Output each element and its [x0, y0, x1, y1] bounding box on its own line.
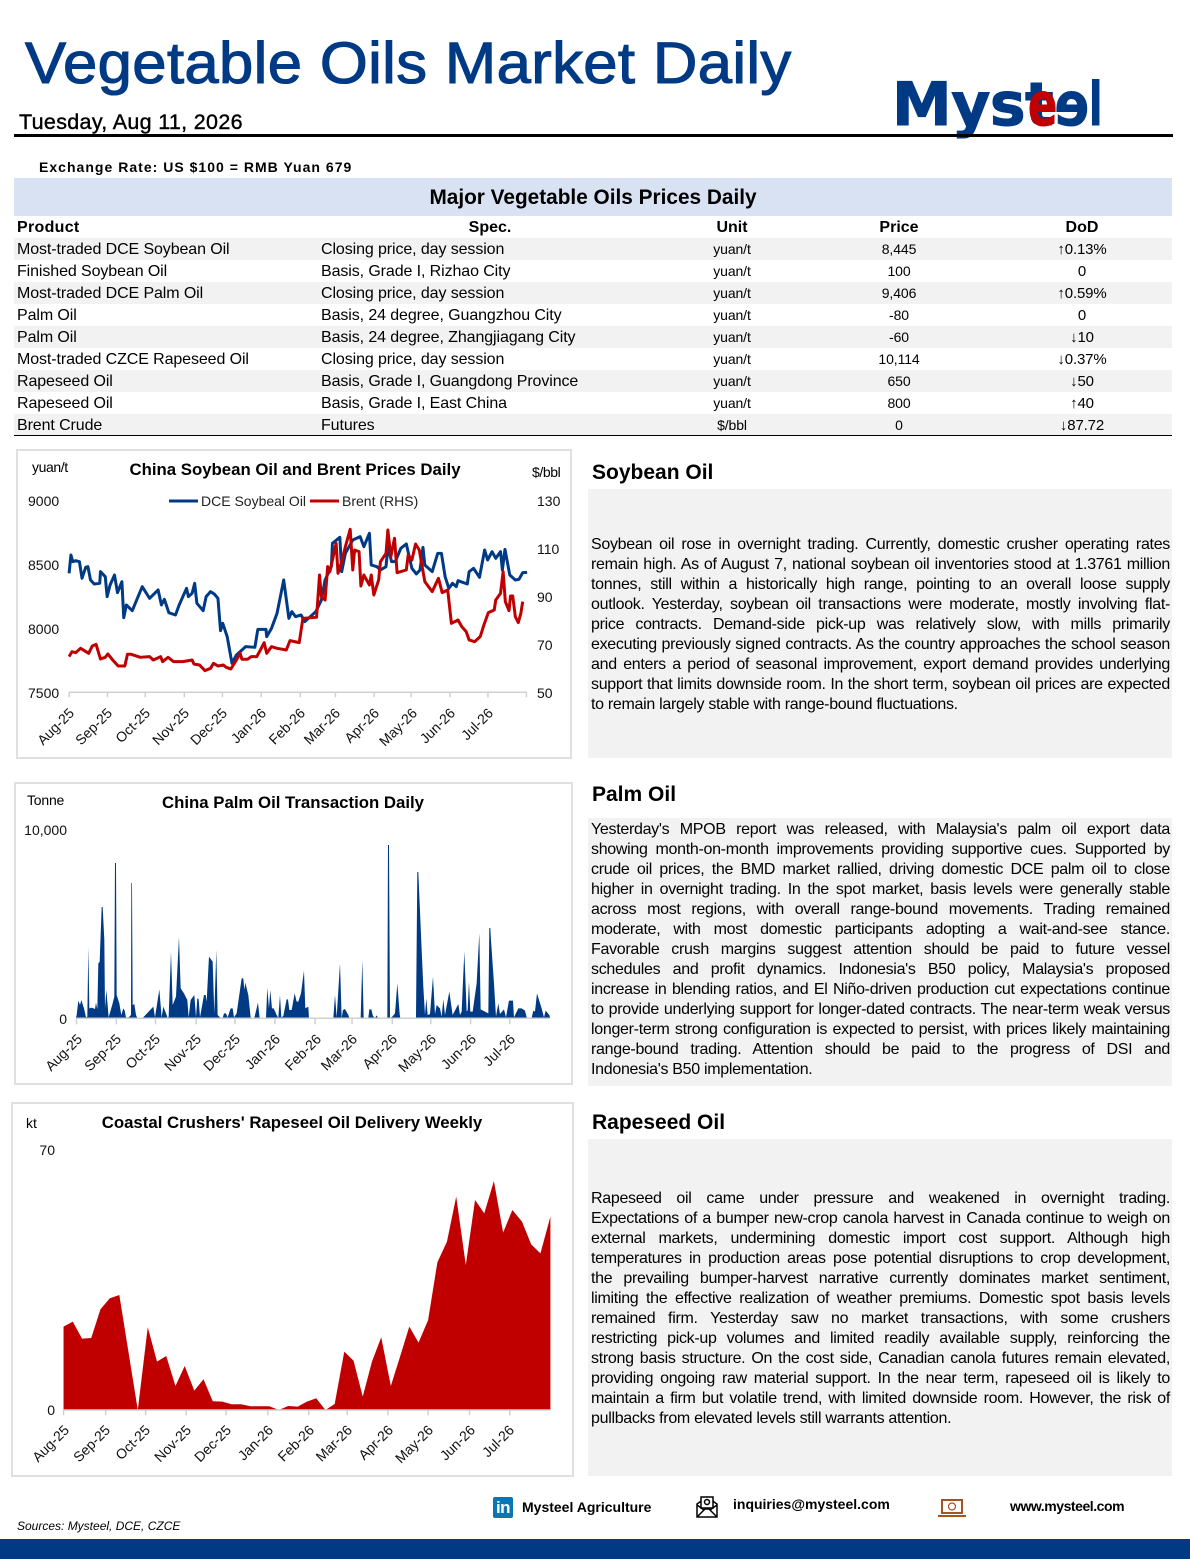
text: palm oil commentary: higher in overnight trading. In the spot market, basis levels were generally stable	[591, 881, 1170, 898]
date: Tuesday, Aug 11, 2026	[19, 110, 243, 134]
text: soybean oil commentary: outlook. Yesterday, soybean oil transactions were moderate, mostly involving flat-	[591, 596, 1170, 613]
row: most-traded CZCE rapeseed oil: yuan/t	[713, 351, 751, 367]
chart title: Coastal Crushers' Rapeseel Oil Delivery Weekly	[102, 1113, 483, 1132]
row: palm oil Guangzhou: 0	[1078, 307, 1086, 324]
row: finished soybean oil: yuan/t	[713, 263, 751, 279]
row: palm oil Guangzhou	[17, 307, 1086, 324]
x axis labels: Jul-26	[479, 1422, 517, 1460]
y axis labels: 0	[59, 1011, 67, 1027]
legend: DCE Soybeal Oil	[201, 493, 306, 509]
chart title: China Soybean Oil and Brent Prices Daily	[129, 460, 461, 479]
x axis labels: Jun-26	[437, 1422, 478, 1463]
x axis labels: Nov-25	[161, 1031, 204, 1074]
row: most-traded DCE palm oil: 9,406	[882, 285, 916, 301]
row: palm oil Zhangjiagang: Basis, 24 degree, Zhangjiagang City	[321, 329, 575, 346]
row: palm oil Zhangjiagang	[14, 326, 1172, 348]
x axis labels: Dec-25	[200, 1031, 243, 1074]
row: rapeseed oil East China: 800	[887, 395, 911, 411]
text: palm oil commentary: to provide underlying support for longer-dated contracts. The near-term weak versus	[591, 1001, 1170, 1018]
x axis labels: Jun-26	[438, 1031, 479, 1072]
x axis labels: Mar-26	[317, 1031, 360, 1073]
x axis labels: Jun-26	[417, 705, 458, 746]
text: palm oil commentary: range-bound trading. Attention should be paid to the progress of DSI and	[591, 1041, 1170, 1058]
row: most-traded DCE palm oil	[14, 282, 1172, 304]
x axis labels: Nov-25	[151, 1422, 194, 1465]
area: palm oil transactions	[76, 845, 550, 1018]
text: soybean oil commentary	[591, 536, 1170, 713]
row: Brent crude: 0	[895, 417, 903, 433]
row: rapeseed oil Guangdong: yuan/t	[713, 373, 751, 389]
row: Brent crude: Brent Crude	[17, 417, 102, 434]
row: Brent crude	[14, 414, 1172, 436]
y axis labels: 10,000	[24, 822, 67, 838]
text: rapeseed oil commentary: pullbacks from elevated levels still warrants attention.	[591, 1410, 951, 1427]
text: rapeseed oil commentary: Rapeseed oil came under pressure and weakened in overnight trading.	[591, 1190, 1170, 1207]
logo: Mysteel: e	[1054, 70, 1089, 140]
x axis labels: May-26	[392, 1422, 436, 1466]
x axis labels: Feb-26	[274, 1422, 317, 1464]
text: soybean oil commentary: Soybean oil rose in overnight trading. Currently, domestic crusher operating rates	[591, 536, 1170, 553]
x axis labels: Jul-26	[458, 705, 496, 743]
x axis labels: Oct-25	[112, 1422, 153, 1463]
x axis labels: Jul-26	[480, 1031, 518, 1069]
logo: Mysteel: l	[1089, 70, 1102, 140]
panel: rapeseed chart	[11, 1102, 574, 1477]
text: rapeseed oil commentary: maintain a firm but volatile trend, with limited downside room. However, the risk of	[591, 1390, 1170, 1407]
row: palm oil Guangzhou: -80	[889, 307, 909, 323]
area: rapeseed oil delivery	[64, 1181, 550, 1410]
panel: soybean chart	[16, 449, 572, 759]
y axis labels: 70	[39, 1142, 55, 1158]
x axis	[76, 1018, 549, 1024]
row: rapeseed oil Guangdong: Rapeseed Oil	[17, 373, 113, 390]
left axis labels: 8500	[28, 557, 59, 573]
x axis labels: Feb-26	[265, 705, 308, 747]
heading: rapeseed oil: Rapeseed Oil	[592, 1111, 725, 1134]
text: palm oil commentary: Indonesia's B50 implementation.	[591, 1061, 812, 1078]
text: rapeseed oil commentary	[591, 1190, 1170, 1427]
row: palm oil Guangzhou: Basis, 24 degree, Guangzhou City	[321, 307, 562, 324]
x axis labels: Mar-26	[312, 1422, 355, 1464]
left axis unit: yuan/t	[32, 459, 68, 475]
line: DCE soybean oil	[69, 533, 527, 663]
x axis labels: Sep-25	[81, 1031, 124, 1074]
text: rapeseed oil commentary: strong basis structure. On the cost side, Canadian canola futures remain elevated,	[591, 1350, 1170, 1367]
row: most-traded CZCE rapeseed oil: ↓0.37%	[1057, 351, 1107, 368]
left axis labels	[28, 493, 59, 701]
row: palm oil Guangzhou: yuan/t	[713, 307, 751, 323]
row: most-traded CZCE rapeseed oil	[17, 351, 1107, 368]
text: rapeseed oil commentary: remained firm. Yesterday saw no market transactions, with some crushers	[591, 1310, 1170, 1327]
right axis unit: $/bbl	[532, 464, 561, 480]
table title band: Major Vegetable Oils Prices Daily	[429, 186, 757, 209]
x axis labels: Nov-25	[149, 705, 192, 748]
text: palm oil commentary: showing month-on-month improvements providing supportive cues. Supported by	[591, 841, 1170, 858]
row: Brent crude: Futures	[321, 417, 375, 434]
x axis labels: Mar-26	[300, 705, 343, 747]
left axis labels: 7500	[28, 685, 59, 701]
row: rapeseed oil Guangdong	[14, 370, 1172, 392]
text: soybean oil commentary: executing previously signed contracts. As the country approaches the school season	[591, 636, 1170, 653]
x axis labels: Aug-25	[42, 1031, 85, 1074]
row: most-traded DCE palm oil: yuan/t	[713, 285, 751, 301]
row: finished soybean oil: 100	[887, 263, 911, 279]
row: most-traded CZCE rapeseed oil: Closing price, day session	[321, 351, 504, 368]
row: most-traded CZCE rapeseed oil: 10,114	[878, 351, 920, 367]
text: palm oil commentary: moderate, with most domestic participants adopting a wait-and-see stance.	[591, 921, 1170, 938]
row: finished soybean oil: Basis, Grade I, Rizhao City	[321, 263, 510, 280]
row: most-traded DCE palm oil: ↑0.59%	[1057, 285, 1107, 302]
text: soybean oil commentary: to remain largely stable with range-bound fluctuations.	[591, 696, 958, 713]
x axis labels: Jan-26	[242, 1031, 283, 1072]
icon: email	[696, 1496, 718, 1518]
text: palm oil commentary: across most regions, with overall range-bound movements. Trading remained	[591, 901, 1170, 918]
text: soybean oil commentary: support that limits downside room. In the short term, soybean oil prices are expected	[591, 676, 1170, 693]
row: rapeseed oil East China: ↑40	[1070, 395, 1094, 412]
panel: palm chart	[14, 782, 573, 1085]
panel: palm oil commentary background	[588, 818, 1172, 1086]
table header row: Product	[17, 219, 80, 236]
right axis labels	[537, 493, 561, 701]
x axis labels: Oct-25	[122, 1031, 163, 1072]
text: rapeseed oil commentary: Expectations of a bumper new-crop canola harvest in Canada continue to weigh on	[591, 1210, 1170, 1227]
right axis labels: 90	[537, 589, 553, 605]
row: most-traded DCE soybean oil: ↑0.13%	[1057, 241, 1107, 258]
icon: laptop	[938, 1499, 966, 1517]
footer: website: www.mysteel.com	[1010, 1498, 1124, 1514]
text: palm oil commentary: Yesterday's MPOB report was released, with Malaysia's palm oil export data	[591, 821, 1170, 838]
x axis labels: Sep-25	[72, 705, 115, 748]
x axis labels: Apr-26	[359, 1031, 400, 1072]
row: most-traded DCE soybean oil	[14, 238, 1172, 260]
x axis labels: May-26	[395, 1031, 439, 1075]
row: most-traded DCE soybean oil: Closing price, day session	[321, 241, 504, 258]
left axis labels: 8000	[28, 621, 59, 637]
text: soybean oil commentary: price contracts. Demand-side pick-up was relatively slow, with mills primarily	[591, 616, 1170, 633]
row: rapeseed oil East China: Basis, Grade I, East China	[321, 395, 507, 412]
x axis	[69, 692, 526, 697]
legend: Brent (RHS)	[342, 493, 418, 509]
x axis labels: Dec-25	[187, 705, 230, 748]
table header row: Spec.	[469, 219, 511, 236]
table header row: Price	[879, 219, 919, 236]
x axis labels: Aug-25	[34, 705, 77, 748]
unit: kt	[26, 1115, 37, 1131]
row: palm oil Zhangjiagang: ↓10	[1070, 329, 1094, 346]
line: Brent	[69, 529, 523, 671]
logo: Mysteel: Myst	[892, 70, 1053, 140]
right axis labels: 70	[537, 637, 553, 653]
sources note: Sources: Mysteel, DCE, CZCE	[17, 1519, 180, 1533]
y axis labels	[24, 822, 67, 1027]
x axis labels: Aug-25	[29, 1422, 72, 1465]
x axis labels: Oct-25	[112, 705, 153, 746]
text: palm oil commentary: longer-term strong configuration is expected to persist, with prices likely maintaining	[591, 1021, 1170, 1038]
text: soybean oil commentary: and enters a period of seasonal improvement, export demand provides underlying	[591, 656, 1170, 673]
row: most-traded DCE soybean oil: Most-traded DCE Soybean Oil	[17, 241, 230, 258]
table header row: DoD	[1066, 219, 1098, 236]
x axis labels	[42, 1031, 518, 1075]
footer: LinkedIn label: Mysteel Agriculture	[522, 1499, 651, 1515]
x axis labels: Feb-26	[281, 1031, 324, 1073]
footer bar	[0, 1539, 1190, 1559]
row: rapeseed oil Guangdong: Basis, Grade I, Guangdong Province	[321, 373, 578, 390]
table title band	[14, 178, 1172, 216]
row: most-traded DCE soybean oil: yuan/t	[713, 241, 751, 257]
x axis labels	[29, 1422, 517, 1466]
row: palm oil Zhangjiagang: yuan/t	[713, 329, 751, 345]
logo: Mysteel: e	[1028, 70, 1057, 140]
x axis labels	[34, 705, 496, 749]
text: soybean oil commentary: remain high. As of August 7, national soybean oil inventories stood at 1.3761 million	[591, 556, 1170, 573]
table: major vegetable oils prices	[14, 178, 1172, 436]
row: rapeseed oil Guangdong: ↓50	[1070, 373, 1094, 390]
header rule	[14, 134, 1173, 137]
row: finished soybean oil: Finished Soybean Oil	[17, 263, 167, 280]
panel: soybean oil commentary background	[588, 489, 1172, 758]
panel: rapeseed oil commentary background	[588, 1139, 1172, 1476]
row: rapeseed oil East China: Rapeseed Oil	[17, 395, 113, 412]
row: most-traded DCE palm oil: Closing price, day session	[321, 285, 504, 302]
right axis labels: 110	[537, 541, 560, 557]
text: rapeseed oil commentary: limiting the effective realization of weather premiums. Domestic spot basis levels	[591, 1290, 1170, 1307]
text: rapeseed oil commentary: providing ongoing raw material support. In the near term, rapeseed oil is likely to	[591, 1370, 1170, 1387]
x axis labels: Apr-26	[355, 1422, 396, 1463]
unit: Tonne	[27, 792, 65, 808]
table header row	[17, 219, 1098, 236]
x axis labels: Sep-25	[70, 1422, 113, 1465]
icon: LinkedIn: in	[496, 1498, 510, 1517]
table header row: Unit	[716, 219, 748, 236]
row: finished soybean oil	[17, 263, 1086, 280]
heading: soybean oil: Soybean Oil	[592, 461, 713, 484]
y axis labels: 0	[47, 1402, 55, 1418]
title: Vegetable Oils Market Daily	[25, 31, 792, 96]
text: rapeseed oil commentary: the prevailing bumper-harvest narrative currently dominates market sentiment,	[591, 1270, 1170, 1287]
row: rapeseed oil East China: yuan/t	[713, 395, 751, 411]
row: most-traded DCE soybean oil: 8,445	[882, 241, 916, 257]
text: rapeseed oil commentary: temperatures in production areas pose potential disruptions to crop development,	[591, 1250, 1170, 1267]
row: Brent crude: $/bbl	[717, 417, 747, 433]
row: rapeseed oil East China	[17, 395, 1094, 412]
text: rapeseed oil commentary: restricting pick-up volumes and limited readily available supply, reinforcing the	[591, 1330, 1170, 1347]
exchange rate: Exchange Rate: US $100 = RMB Yuan 679	[39, 159, 352, 175]
text: palm oil commentary	[591, 821, 1170, 1078]
x axis labels: May-26	[376, 705, 420, 749]
text: palm oil commentary: Favorable crush margins suggest attention should be paid to future vessel	[591, 941, 1170, 958]
footer: email: inquiries@mysteel.com	[733, 1496, 890, 1512]
text: soybean oil commentary: tonnes, still within a historically high range, pointing to an overall loose supply	[591, 576, 1170, 593]
row: palm oil Zhangjiagang: -60	[889, 329, 909, 345]
text: rapeseed oil commentary: external markets, undermining domestic import cost support. Although high	[591, 1230, 1170, 1247]
heading: palm oil: Palm Oil	[592, 783, 676, 806]
row: Brent crude: ↓87.72	[1060, 417, 1104, 434]
legend	[169, 493, 418, 509]
x axis labels: Dec-25	[191, 1422, 234, 1465]
row: most-traded DCE palm oil: Most-traded DCE Palm Oil	[17, 285, 203, 302]
left axis labels: 9000	[28, 493, 59, 509]
row: rapeseed oil Guangdong: 650	[887, 373, 911, 389]
icon: LinkedIn	[493, 1497, 513, 1518]
x axis labels: Jan-26	[228, 705, 269, 746]
row: palm oil Zhangjiagang: Palm Oil	[17, 329, 77, 346]
chart title: China Palm Oil Transaction Daily	[162, 793, 425, 812]
row: palm oil Guangzhou: Palm Oil	[17, 307, 77, 324]
text: palm oil commentary: schedules and profit dynamics. Indonesia's B50 policy, Malaysia's proposed	[591, 961, 1170, 978]
x axis labels: Jan-26	[235, 1422, 276, 1463]
x axis	[64, 1410, 550, 1415]
right axis labels: 130	[537, 493, 561, 509]
row: most-traded CZCE rapeseed oil: Most-traded CZCE Rapeseed Oil	[17, 351, 249, 368]
row: finished soybean oil: 0	[1078, 263, 1086, 280]
y axis labels	[39, 1142, 55, 1418]
text: palm oil commentary: crude oil prices, the BMD market rallied, driving domestic DCE palm oil to close	[591, 861, 1170, 878]
right axis labels: 50	[537, 685, 553, 701]
text: palm oil commentary: increase in blending ratios, and El Niño-driven production cut expectations continue	[591, 981, 1170, 998]
x axis labels: Apr-26	[341, 705, 382, 746]
